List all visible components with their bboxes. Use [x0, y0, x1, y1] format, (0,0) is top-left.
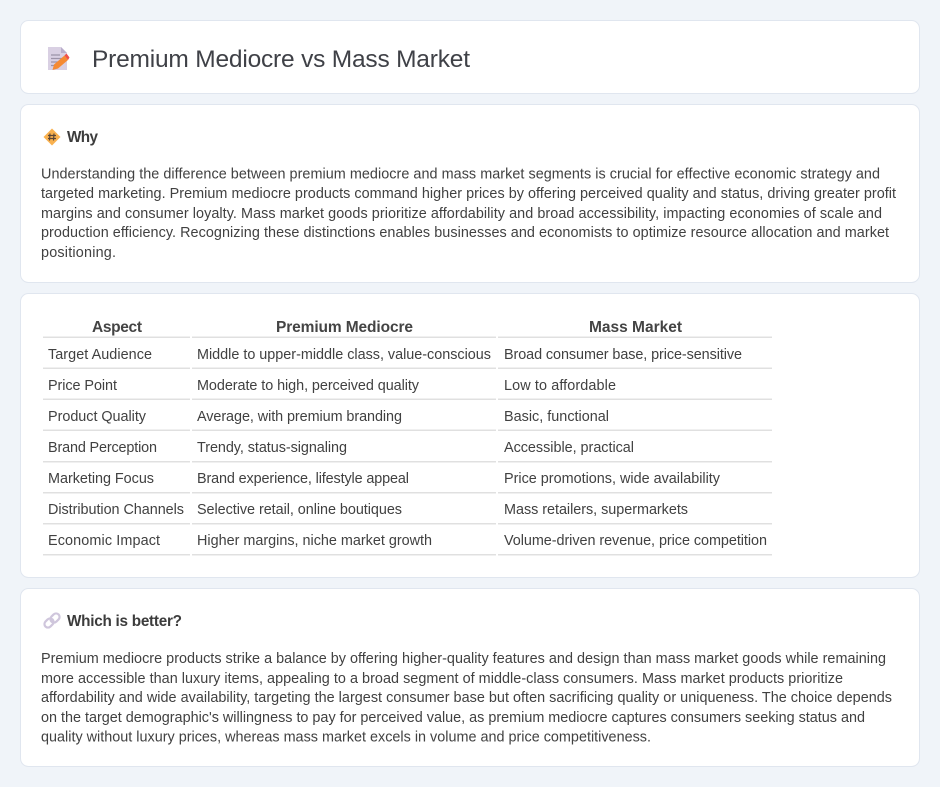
heading: which is better: Which is better? [67, 613, 182, 630]
row: distribution channels: Distribution Channels [48, 502, 184, 518]
panel: why [20, 104, 920, 282]
row: marketing focus: Brand experience, lifestyle appeal [197, 471, 409, 487]
panel: comparison table [20, 294, 920, 578]
icon: chain link [43, 612, 61, 629]
row: brand perception: Brand Perception [48, 440, 157, 456]
row: marketing focus: Marketing Focus [48, 471, 154, 487]
title text: Premium Mediocre vs Mass Market [92, 46, 470, 73]
icon: diamond sign [44, 128, 60, 146]
row: product quality: Average, with premium branding [197, 409, 402, 425]
panel: title [20, 20, 920, 94]
row: brand perception: Accessible, practical [504, 440, 634, 456]
icon: document with pencil [48, 47, 70, 70]
text block: why [41, 166, 896, 261]
table header row: Aspect [92, 319, 142, 336]
text block: which is better: on the target demographic's willingness to pay for perceived value, as premium mediocre captures consumers seeking status and [41, 710, 865, 726]
heading: why: Why [67, 129, 98, 146]
row: brand perception: Trendy, status-signaling [197, 440, 347, 456]
row: price point: Price Point [48, 378, 117, 394]
text block: why: production efficiency. Recognizing these distinctions enables businesses and economists to optimize resource allocation and market [41, 225, 889, 241]
row: target audience [48, 347, 742, 363]
row: distribution channels: Mass retailers, supermarkets [504, 502, 688, 518]
text block: why: margins and consumer loyalty. Mass market goods prioritize affordability and broad accessibility, impacting economies of scale and [41, 206, 882, 222]
panel: which is better [20, 588, 920, 766]
row: product quality: Basic, functional [504, 409, 609, 425]
row: target audience: Middle to upper-middle class, value-conscious [197, 347, 491, 363]
row: marketing focus: Price promotions, wide availability [504, 471, 721, 487]
text block: which is better: more accessible than luxury items, appealing to a broad segment of middle-class consumers. Mass market products prioritize [41, 671, 843, 687]
text block: which is better: Premium mediocre products strike a balance by offering higher-quality features and design than mass market goods while remaining [41, 651, 886, 667]
row: price point [48, 378, 616, 394]
text block: why: Understanding the difference between premium mediocre and mass market segments is crucial for effective economic strategy and [41, 166, 880, 182]
row: economic impact [48, 533, 767, 549]
row: distribution channels [48, 502, 688, 518]
row: economic impact: Volume-driven revenue, price competition [504, 533, 767, 549]
table header row: Mass Market [589, 319, 682, 336]
text block: which is better: quality without luxury prices, whereas mass market excels in volume and price competitiveness. [41, 730, 651, 746]
row: brand perception [48, 440, 634, 456]
text block: which is better [41, 651, 892, 746]
row: target audience: Broad consumer base, price-sensitive [504, 347, 742, 363]
row: economic impact: Economic Impact [48, 533, 160, 549]
row: economic impact: Higher margins, niche market growth [197, 533, 432, 549]
row: product quality [48, 409, 609, 425]
table rules [43, 336, 772, 556]
row: price point: Moderate to high, perceived quality [197, 378, 420, 394]
row: product quality: Product Quality [48, 409, 147, 425]
row: target audience: Target Audience [48, 347, 152, 363]
row: price point: Low to affordable [504, 378, 616, 394]
row: distribution channels: Selective retail, online boutiques [197, 502, 402, 518]
row: marketing focus [48, 471, 721, 487]
text block: which is better: affordability and wide availability, targeting the largest consumer base but often sacrificing quality or uniqueness. The choice depends [41, 690, 892, 706]
text block: why: positioning. [41, 245, 116, 261]
text block: why: targeted marketing. Premium mediocre products command higher prices by offering perceived quality and status, driving greater profit [41, 186, 896, 202]
table header row [92, 319, 682, 336]
table header row: Premium Mediocre [276, 319, 413, 336]
